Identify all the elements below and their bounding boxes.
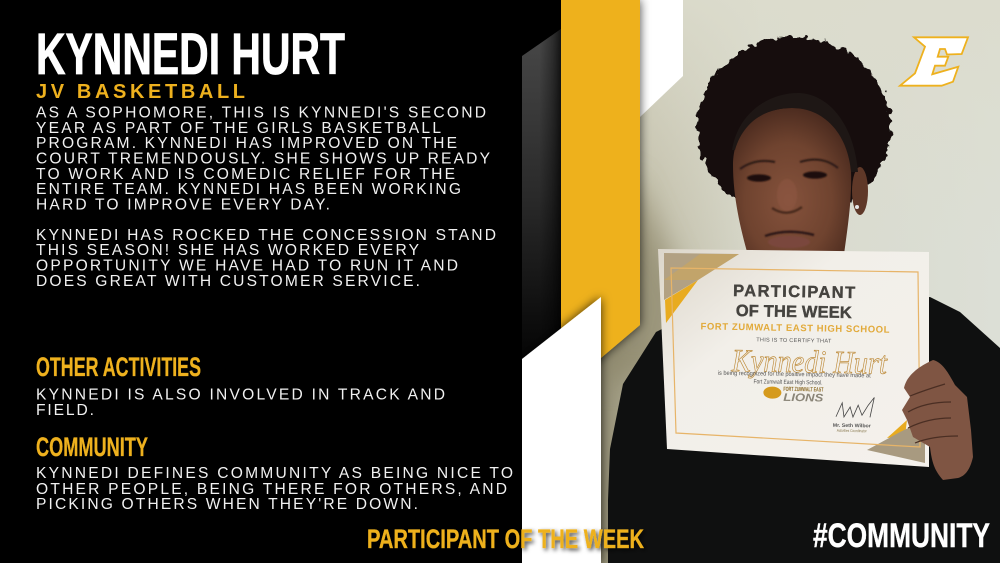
heading: other activities: OTHER ACTIVITIES <box>36 352 201 382</box>
text block: biography: TO WORK AND IS COMEDIC RELIEF FOR THE <box>36 166 455 183</box>
white lower stripe <box>522 297 601 563</box>
facial features <box>740 160 838 248</box>
text block: community: KYNNEDI DEFINES COMMUNITY AS BEING NICE TO <box>36 465 513 482</box>
text block: concession stand: DOES GREAT WITH CUSTOMER SERVICE. <box>36 273 420 290</box>
text block: other activities: KYNNEDI IS ALSO INVOLVED IN TRACK AND <box>36 386 445 404</box>
subtitle: JV BASKETBALL <box>36 81 245 103</box>
heading: community: COMMUNITY <box>36 432 148 462</box>
certificate text: THIS IS TO CERTIFY THAT <box>756 337 832 345</box>
text block: biography: HARD TO IMPROVE EVERY DAY. <box>36 196 330 214</box>
lions logo: FORT ZUMWALT EAST <box>783 387 824 394</box>
text block: concession stand <box>36 227 496 290</box>
text block: concession stand: THIS SEASON! SHE HAS WORKED EVERY <box>36 242 420 259</box>
text block: concession stand: OPPORTUNITY WE HAVE HAD TO RUN IT AND <box>36 258 458 274</box>
certificate <box>658 249 929 467</box>
signature <box>833 397 874 433</box>
text block: community: OTHER PEOPLE, BEING THERE FOR OTHERS, AND <box>36 481 507 498</box>
certificate text: PARTICIPANT <box>733 282 855 302</box>
lions logo: LIONS <box>783 392 824 405</box>
left black panel <box>0 0 620 563</box>
text block: concession stand: KYNNEDI HAS ROCKED THE CONCESSION STAND <box>36 227 496 244</box>
footer label: participant of the week: PARTICIPANT OF THE WEEK <box>367 524 644 554</box>
orange border <box>671 268 920 447</box>
text block: biography: PROGRAM. KYNNEDI HAS IMPROVED ON THE <box>36 135 457 152</box>
logo: E mark <box>900 37 968 86</box>
hand <box>902 360 973 480</box>
text block: biography: YEAR AS PART OF THE GIRLS BASKETBALL <box>36 120 441 137</box>
dark stripe <box>522 29 561 362</box>
ear <box>852 167 868 215</box>
text block: biography <box>36 104 491 214</box>
certificate text: is being recognized for the positive impact they have made at <box>718 371 871 379</box>
text block: biography: ENTIRE TEAM. KYNNEDI HAS BEEN WORKING <box>36 181 461 198</box>
certificate text: FORT ZUMWALT EAST HIGH SCHOOL <box>700 321 890 336</box>
text block: biography: AS A SOPHOMORE, THIS IS KYNNEDI'S SECOND <box>36 104 486 122</box>
paper <box>658 249 929 467</box>
title: KYNNEDI HURT <box>36 22 345 87</box>
white upper stripe <box>640 0 683 117</box>
text block: other activities <box>36 386 445 419</box>
hairline <box>732 93 858 172</box>
certificate text <box>699 281 890 434</box>
text block: community <box>36 465 513 513</box>
certificate text: OF THE WEEK <box>736 302 852 322</box>
signature: Mr. Seth Wilbor <box>833 423 871 429</box>
corner graphics <box>664 253 925 463</box>
text block: other activities: FIELD. <box>36 402 94 419</box>
certificate text: Kynnedi Hurt <box>731 342 888 381</box>
lions logo <box>763 386 824 405</box>
signature: Activities Coordinator <box>837 428 867 433</box>
photo: student holding certificate <box>590 0 1000 563</box>
text block: biography: COURT TREMENDOUSLY. SHE SHOWS UP READY <box>36 150 491 168</box>
certificate text: Fort Zumwalt East High School. <box>754 379 823 387</box>
earring <box>855 205 859 209</box>
sweater <box>608 297 1000 563</box>
face <box>733 108 851 262</box>
gold stripe <box>561 0 640 390</box>
text block: community: PICKING OTHERS WHEN THEY'RE DOWN. <box>36 496 418 513</box>
hair <box>697 37 891 217</box>
wall background <box>590 0 1000 563</box>
